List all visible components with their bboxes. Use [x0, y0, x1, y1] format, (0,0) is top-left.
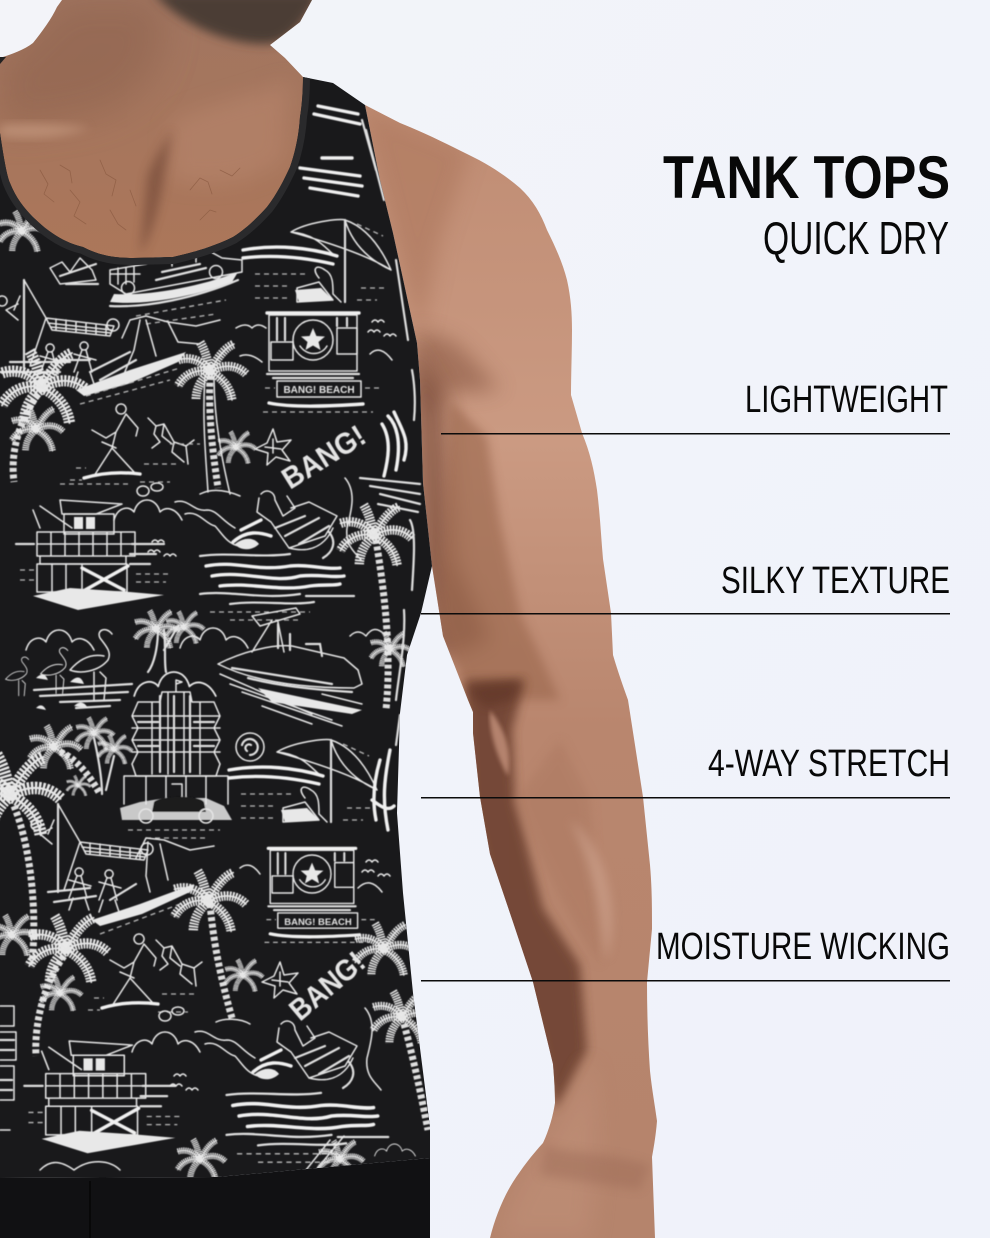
- motif: top left palm fragment: [0, 211, 98, 284]
- motif: bottom fronds: [40, 1136, 415, 1180]
- motif: discs: [60, 444, 200, 496]
- motif: second center palm: [174, 870, 263, 1024]
- motif: small palm cluster: [30, 718, 132, 796]
- motif: bang logo: BANG!: [276, 419, 372, 496]
- motif: cloud and birds by tower: [114, 500, 182, 556]
- motif: lifeguard tower: [16, 500, 170, 610]
- motif: second dog: [156, 940, 202, 986]
- tank top: [0, 77, 432, 1178]
- motif: second bang logo: BANG!: [283, 946, 372, 1027]
- motif: art deco hotel and car: [120, 680, 232, 838]
- motif: second net: [31, 804, 153, 892]
- motif: frisbee runner: [70, 404, 176, 482]
- motif: starfish: [255, 429, 291, 465]
- motif: second discs: [159, 1007, 184, 1021]
- motif: figure right: [360, 240, 420, 512]
- motif: second hut with sign: BANG! BEACH: [284, 917, 352, 928]
- motif: big left palm: [0, 754, 60, 964]
- motif: car with beach strokes: [110, 246, 242, 324]
- motif: tall palm: [340, 504, 412, 710]
- arm shading: [360, 104, 650, 1238]
- motif: flamingos: [5, 630, 132, 710]
- motif: right edge palm: [355, 923, 434, 1130]
- motif: volleyball players and shore: [0, 316, 220, 404]
- motif: volleyball net: [0, 280, 119, 368]
- motif: second players and shore: [48, 838, 214, 934]
- motif: lifeguard hut with sign: BANG! BEACH: [283, 385, 355, 396]
- motif: umbrella two: [229, 740, 377, 822]
- chest shading and beard: [0, 0, 320, 254]
- motif: sports boat: [218, 608, 362, 726]
- motif: palm center: [178, 342, 256, 496]
- motif: second starfish: [262, 962, 298, 998]
- motif: small twin palms: [134, 610, 248, 696]
- motif: bird cloud by boat: [350, 629, 384, 636]
- motif: second hut with sign: [264, 848, 377, 942]
- motif: second waves: [226, 1093, 388, 1162]
- motif: sun: [236, 733, 264, 761]
- motif: lifeguard hut with sign: [263, 313, 381, 412]
- motif: shoreline strokes near strap: [300, 106, 384, 200]
- motif: dog: [148, 418, 194, 464]
- motif: umbrella and sunbather: [243, 220, 391, 302]
- motif: second cloud and birds: [132, 1032, 200, 1090]
- print pattern: [0, 77, 434, 1180]
- motif: second left palm: [0, 915, 107, 1056]
- motif: second tower: [24, 1041, 181, 1153]
- motif: birds and clouds: [236, 320, 396, 362]
- photo: man's arm and torso: [0, 0, 670, 1238]
- chest and neck: [0, 0, 312, 258]
- motif: edge mass: [372, 715, 400, 830]
- tank top left strap: [0, 57, 6, 64]
- motif: edge foliage: [396, 520, 414, 700]
- motif: second runner: [88, 934, 194, 1012]
- motif: partial tower left: [0, 1006, 16, 1130]
- motif: jet ski: [175, 478, 361, 560]
- motif: birds by second hut: [240, 860, 390, 892]
- shorts: [0, 1158, 430, 1238]
- motif: second jet ski: [195, 1008, 381, 1090]
- motif: waves: [200, 554, 354, 620]
- arm and shoulder: [360, 100, 670, 1238]
- tank top binding: [0, 77, 303, 258]
- motif: palm left: [2, 350, 87, 482]
